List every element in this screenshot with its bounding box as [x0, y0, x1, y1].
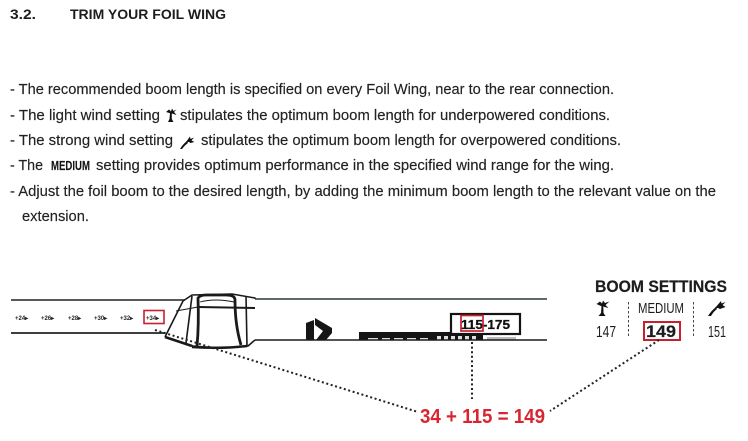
extension scale markings: [15, 316, 160, 322]
red highlight on 115: [461, 316, 483, 331]
icon: bent palm tree: [708, 301, 726, 316]
boom main tube: [255, 299, 547, 340]
setting dividers: [628, 302, 694, 337]
extension scale markings: +34▸: [146, 316, 160, 322]
instructions text block: MEDIUM: [51, 159, 90, 173]
boom clamp: [165, 294, 255, 348]
extension scale markings: +24▸: [15, 316, 29, 322]
result equation: 34 + 115 = 149: [420, 406, 545, 428]
icon: palm tree: [596, 300, 610, 316]
section title: TRIM YOUR FOIL WING: [70, 6, 226, 22]
icon: palm tree inline: [166, 108, 176, 122]
panel heading: BOOM SETTINGS: [595, 278, 727, 296]
instructions text block: stipulates the optimum boom length for underpowered conditions.: [180, 107, 610, 124]
extension scale markings: +28▸: [68, 316, 82, 322]
icon: bent palm tree inline: [180, 136, 194, 149]
red highlight on +34: [144, 310, 164, 324]
medium label: MEDIUM: [638, 300, 684, 317]
medium value: 149: [646, 322, 676, 341]
brand logo: [306, 318, 332, 340]
instructions text block: - The strong wind setting: [10, 132, 173, 149]
section number: 3.2.: [10, 6, 36, 22]
boom extension tube: [11, 300, 185, 333]
grey fragment: [487, 337, 516, 340]
extension scale markings: +30▸: [94, 316, 108, 322]
black label: [359, 332, 483, 340]
instructions text block: - Adjust the foil boom to the desired length, by adding the minimum boom length to the relevant value on the: [10, 183, 716, 200]
instructions text block: - The light wind setting: [10, 107, 160, 124]
size range box: [451, 314, 520, 334]
instructions text block: - The: [10, 157, 43, 174]
instructions text block: extension.: [22, 208, 89, 225]
instructions text block: [10, 81, 716, 225]
light wind value: 147: [596, 324, 616, 341]
boom illustration: [11, 294, 547, 348]
instructions text block: stipulates the optimum boom length for overpowered conditions.: [201, 132, 621, 149]
red highlight on 149: [644, 322, 680, 340]
label lettering fragment: [368, 336, 476, 340]
size range text: 115-175: [461, 318, 510, 332]
strong wind value: 151: [708, 324, 726, 341]
dotted connector lines: [155, 330, 659, 412]
extension scale markings: +26▸: [41, 316, 55, 322]
extension scale markings: +32▸: [120, 316, 134, 322]
instructions text block: - The recommended boom length is specified on every Foil Wing, near to the rear connection.: [10, 81, 614, 98]
instructions text block: setting provides optimum performance in the specified wind range for the wing.: [96, 157, 614, 174]
boom settings panel: [595, 278, 727, 341]
